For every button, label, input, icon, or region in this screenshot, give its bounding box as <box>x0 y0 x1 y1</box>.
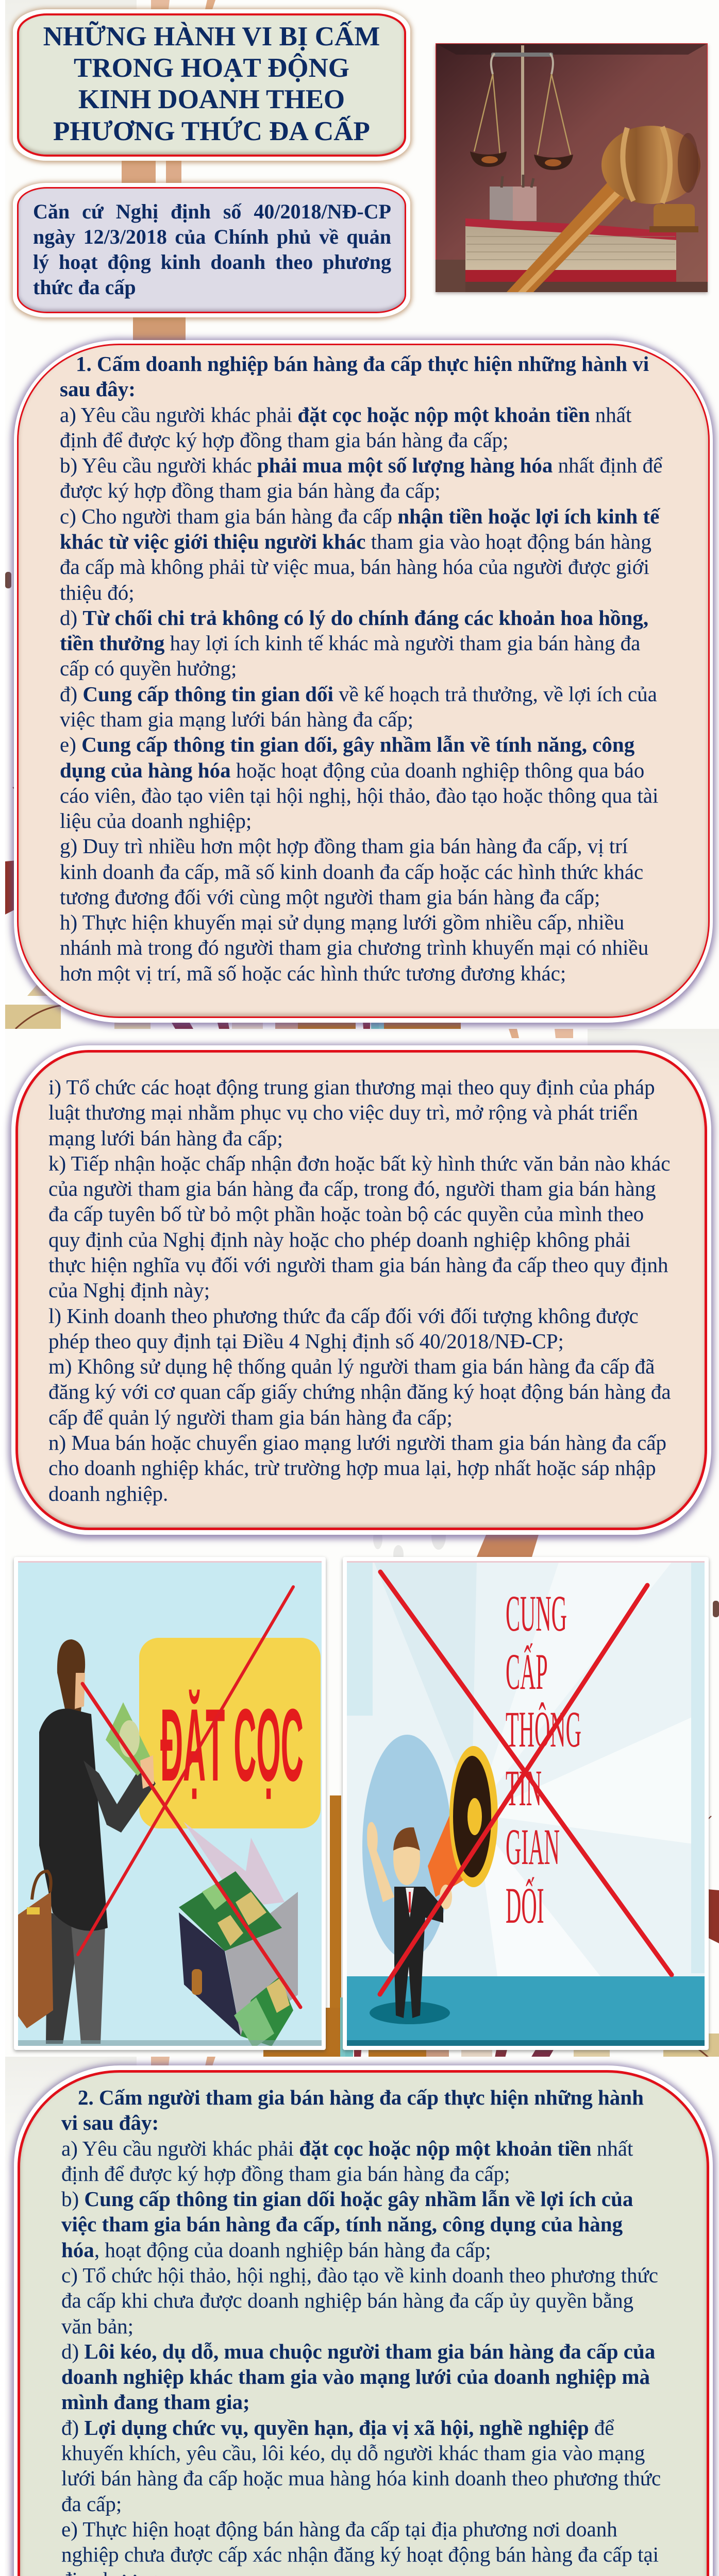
heading <box>43 21 380 146</box>
section 2 text: d) Lôi kéo, dụ dỗ, mua chuộc người tham gia bán hàng đa cấp của <box>61 2340 655 2363</box>
image: false information forbidden <box>343 1557 709 2050</box>
section 2 text: lưới bán hàng đa cấp hoặc mua hàng hóa kinh doanh theo phương thức <box>61 2466 661 2490</box>
photo: scales of justice, gavel and book <box>436 43 708 292</box>
section 2 text: 2. Cấm người tham gia bán hàng đa cấp thực hiện những hành <box>78 2086 644 2109</box>
panel: section 1 continued <box>11 1045 711 1535</box>
red heading: THÔNG <box>506 1701 581 1758</box>
section 1 text: được ký hợp đồng tham gia bán hàng đa cấp; <box>60 479 440 502</box>
section 2 text: việc tham gia bán hàng đa cấp, tính năng, công dụng của hàng <box>61 2212 623 2236</box>
image: deposit forbidden <box>14 1557 326 2050</box>
continued text: luật thương mại nhằm phục vụ cho việc duy trì, mở rộng và phát triển <box>48 1100 638 1124</box>
section 2 text: c) Tổ chức hội thảo, hội nghị, đào tạo về kinh doanh theo phương thức <box>61 2263 658 2287</box>
section 2 text: vi sau đây: <box>61 2111 159 2134</box>
section 1 text: dụng của hàng hóa hoặc hoạt động của doanh nghiệp thông qua báo <box>60 758 644 782</box>
section 1 text: e) Cung cấp thông tin gian dối, gây nhầm lẫn về tính năng, công <box>60 733 634 756</box>
red heading: TIN <box>506 1759 542 1817</box>
section 1 text: thiệu đó; <box>60 581 135 604</box>
section 1 text: liệu của doanh nghiệp; <box>60 809 252 833</box>
section 2 text: b) Cung cấp thông tin gian dối hoặc gây nhầm lẫn về lợi ích của <box>61 2187 633 2211</box>
section 1 text: hơn một vị trí, mã số hoặc các hình thức tương đương khác; <box>60 961 566 985</box>
panel: section 1 <box>14 340 713 1023</box>
continued text: n) Mua bán hoặc chuyển giao mạng lưới người tham gia bán hàng đa cấp <box>48 1431 666 1454</box>
section 1 text: đa cấp mà không phải từ việc mua, bán hàng hóa của người được giới <box>60 555 649 579</box>
section 1 border box <box>17 344 710 1018</box>
icon: scales <box>470 45 573 221</box>
section 2 border box <box>18 2070 709 2576</box>
section 1 text: b) Yêu cầu người khác phải mua một số lượng hàng hóa nhất định để <box>60 453 662 477</box>
section 2 text: hóa, hoạt động của doanh nghiệp bán hàng đa cấp; <box>61 2238 491 2262</box>
heading: TRONG HOẠT ĐỘNG <box>74 53 349 83</box>
continued text: m) Không sử dụng hệ thống quản lý người tham gia bán hàng đa cấp đã <box>48 1354 655 1378</box>
ellipse backdrop <box>362 1735 452 1959</box>
title border box <box>17 13 406 157</box>
icon: gavel <box>507 126 700 292</box>
continued border box <box>15 1050 707 1530</box>
red heading <box>506 1585 581 1934</box>
section 1 text: khác từ việc giới thiệu người khác tham gia vào hoạt động bán hàng <box>60 530 651 553</box>
red heading: GIAN <box>506 1818 560 1875</box>
figure: businessman <box>14 1639 156 2044</box>
continued text <box>48 1075 671 1505</box>
section 1 text: định để được ký hợp đồng tham gia bán hàng đa cấp; <box>60 428 509 452</box>
section 1 text: d) Từ chối chi trả không có lý do chính đáng các khoản hoa hồng, <box>60 606 648 630</box>
red heading: CUNG <box>506 1585 567 1642</box>
section 2 text: đa cấp; <box>61 2492 122 2515</box>
legal basis border box <box>17 187 406 313</box>
continued text: l) Kinh doanh theo phương thức đa cấp đối với đối tượng không được <box>48 1304 639 1328</box>
heading: NHỮNG HÀNH VI BỊ CẤM <box>43 22 380 52</box>
red cross <box>380 1572 672 1994</box>
section 1 text: cấp có quyền hưởng; <box>60 656 237 680</box>
continued text: mạng lưới bán hàng đa cấp; <box>48 1126 283 1150</box>
section 1 text: c) Cho người tham gia bán hàng đa cấp nhận tiền hoặc lợi ích kinh tế <box>60 504 659 528</box>
legal basis text: ngày 12/3/2018 của Chính phủ về quản <box>33 225 391 248</box>
section 2 text: đa cấp khi chưa được doanh nghiệp bán hàng đa cấp ủy quyền bằng <box>61 2289 633 2312</box>
continued text: của người tham gia bán hàng đa cấp, trong đó, người tham gia bán hàng <box>48 1177 656 1200</box>
icon: law book <box>436 218 708 292</box>
section 2 text <box>61 2086 661 2576</box>
continued text: cho doanh nghiệp khác, trừ trường hợp mua lại, hợp nhất hoặc sáp nhập <box>48 1456 656 1480</box>
section 2 text: doanh nghiệp khác tham gia vào mạng lưới của doanh nghiệp mà <box>61 2365 650 2388</box>
continued text: của Nghị định này; <box>48 1278 210 1302</box>
continued text: k) Tiếp nhận hoặc chấp nhận đơn hoặc bất kỳ hình thức văn bản nào khác <box>48 1151 670 1175</box>
continued text: thực hiện nghĩa vụ đối với người tham gia bán hàng đa cấp theo quy định <box>48 1253 668 1277</box>
section 1 text: tương đương đối với cùng một người tham gia bán hàng đa cấp; <box>60 885 600 909</box>
continued text: quy định của Nghị định này hoặc cho phép doanh nghiệp không phải <box>48 1228 631 1251</box>
section 2 text: định để được ký hợp đồng tham gia bán hàng đa cấp; <box>61 2162 510 2185</box>
figure: businessman <box>367 1822 452 2024</box>
legal basis text <box>33 200 391 299</box>
continued text: doanh nghiệp. <box>48 1482 168 1505</box>
panel: title <box>13 9 410 161</box>
red cross <box>78 1587 300 2007</box>
panel: legal basis <box>13 183 410 317</box>
legal basis text: Căn cứ Nghị định số 40/2018/NĐ-CP <box>33 200 391 223</box>
continued text: cấp để quản lý người tham gia bán hàng đa cấp; <box>48 1405 453 1429</box>
section 1 text: tiền thưởng hay lợi ích kinh tế khác mà người tham gia bán hàng đa <box>60 631 640 655</box>
section 1 text: nhánh mà trong đó người tham gia chương trình khuyến mại có nhiều <box>60 936 648 959</box>
sign: yellow: ĐẶT CỌC <box>160 1688 304 1803</box>
continued text: i) Tổ chức các hoạt động trung gian thương mại theo quy định của pháp <box>48 1075 655 1099</box>
continued text: đăng ký với cơ quan cấp giấy chứng nhận đăng ký hoạt động bán hàng đa <box>48 1380 671 1403</box>
red heading: CẤP <box>506 1643 548 1700</box>
section 2 text: văn bản; <box>61 2314 133 2338</box>
heading: PHƯƠNG THỨC ĐA CẤP <box>53 116 370 146</box>
section 1 text: a) Yêu cầu người khác phải đặt cọc hoặc nộp một khoản tiền nhất <box>60 403 631 427</box>
panel: section 2, 3, 4 <box>14 2065 713 2576</box>
sign: yellow <box>139 1638 321 1828</box>
section 1 text: g) Duy trì nhiều hơn một hợp đồng tham gia bán hàng đa cấp, vị trí <box>60 834 628 858</box>
section 1 text: đ) Cung cấp thông tin gian dối về kế hoạch trả thưởng, về lợi ích của <box>60 682 657 706</box>
icon: safe with money <box>179 1822 298 2048</box>
continued text: phép theo quy định tại Điều 4 Nghị định số 40/2018/NĐ-CP; <box>48 1329 564 1353</box>
continued text: đa cấp tuyên bố từ bỏ một phần hoặc toàn bộ các quyền của mình theo <box>48 1202 644 1226</box>
section 2 text: nghiệp chưa được cấp xác nhận đăng ký hoạt động bán hàng đa cấp tại <box>61 2543 659 2566</box>
section 2 text: a) Yêu cầu người khác phải đặt cọc hoặc nộp một khoản tiền nhất <box>61 2137 633 2160</box>
section 2 text: đ) Lợi dụng chức vụ, quyền hạn, địa vị xã hội, nghề nghiệp để <box>61 2416 614 2439</box>
section 2 text: khuyến khích, yêu cầu, lôi kéo, dụ dỗ người khác tham gia vào mạng <box>61 2441 645 2465</box>
legal basis text: thức đa cấp <box>33 276 136 299</box>
section 1 text: kinh doanh đa cấp, mã số kinh doanh đa cấp hoặc các hình thức khác <box>60 860 643 884</box>
section 1 text: việc tham gia mạng lưới bán hàng đa cấp; <box>60 707 413 731</box>
icon: megaphone <box>428 1746 498 1897</box>
heading: KINH DOANH THEO <box>78 84 345 114</box>
section 1 text: 1. Cấm doanh nghiệp bán hàng đa cấp thực hiện những hành vi <box>76 352 649 376</box>
legal basis text: lý hoạt động kinh doanh theo phương <box>33 250 391 274</box>
red heading: DỐI <box>506 1877 544 1934</box>
section 1 text: sau đây: <box>60 377 136 401</box>
section 2 text: e) Thực hiện hoạt động bán hàng đa cấp tại địa phương nơi doanh <box>61 2517 617 2541</box>
section 1 text: cáo viên, đào tạo viên tại hội nghị, hội thảo, đào tạo hoặc thông qua tài <box>60 784 658 807</box>
section 1 text: h) Thực hiện khuyến mại sử dụng mạng lưới gồm nhiều cấp, nhiều <box>60 910 624 934</box>
section 2 text: mình đang tham gia; <box>61 2390 250 2414</box>
section 1 text <box>60 352 663 985</box>
